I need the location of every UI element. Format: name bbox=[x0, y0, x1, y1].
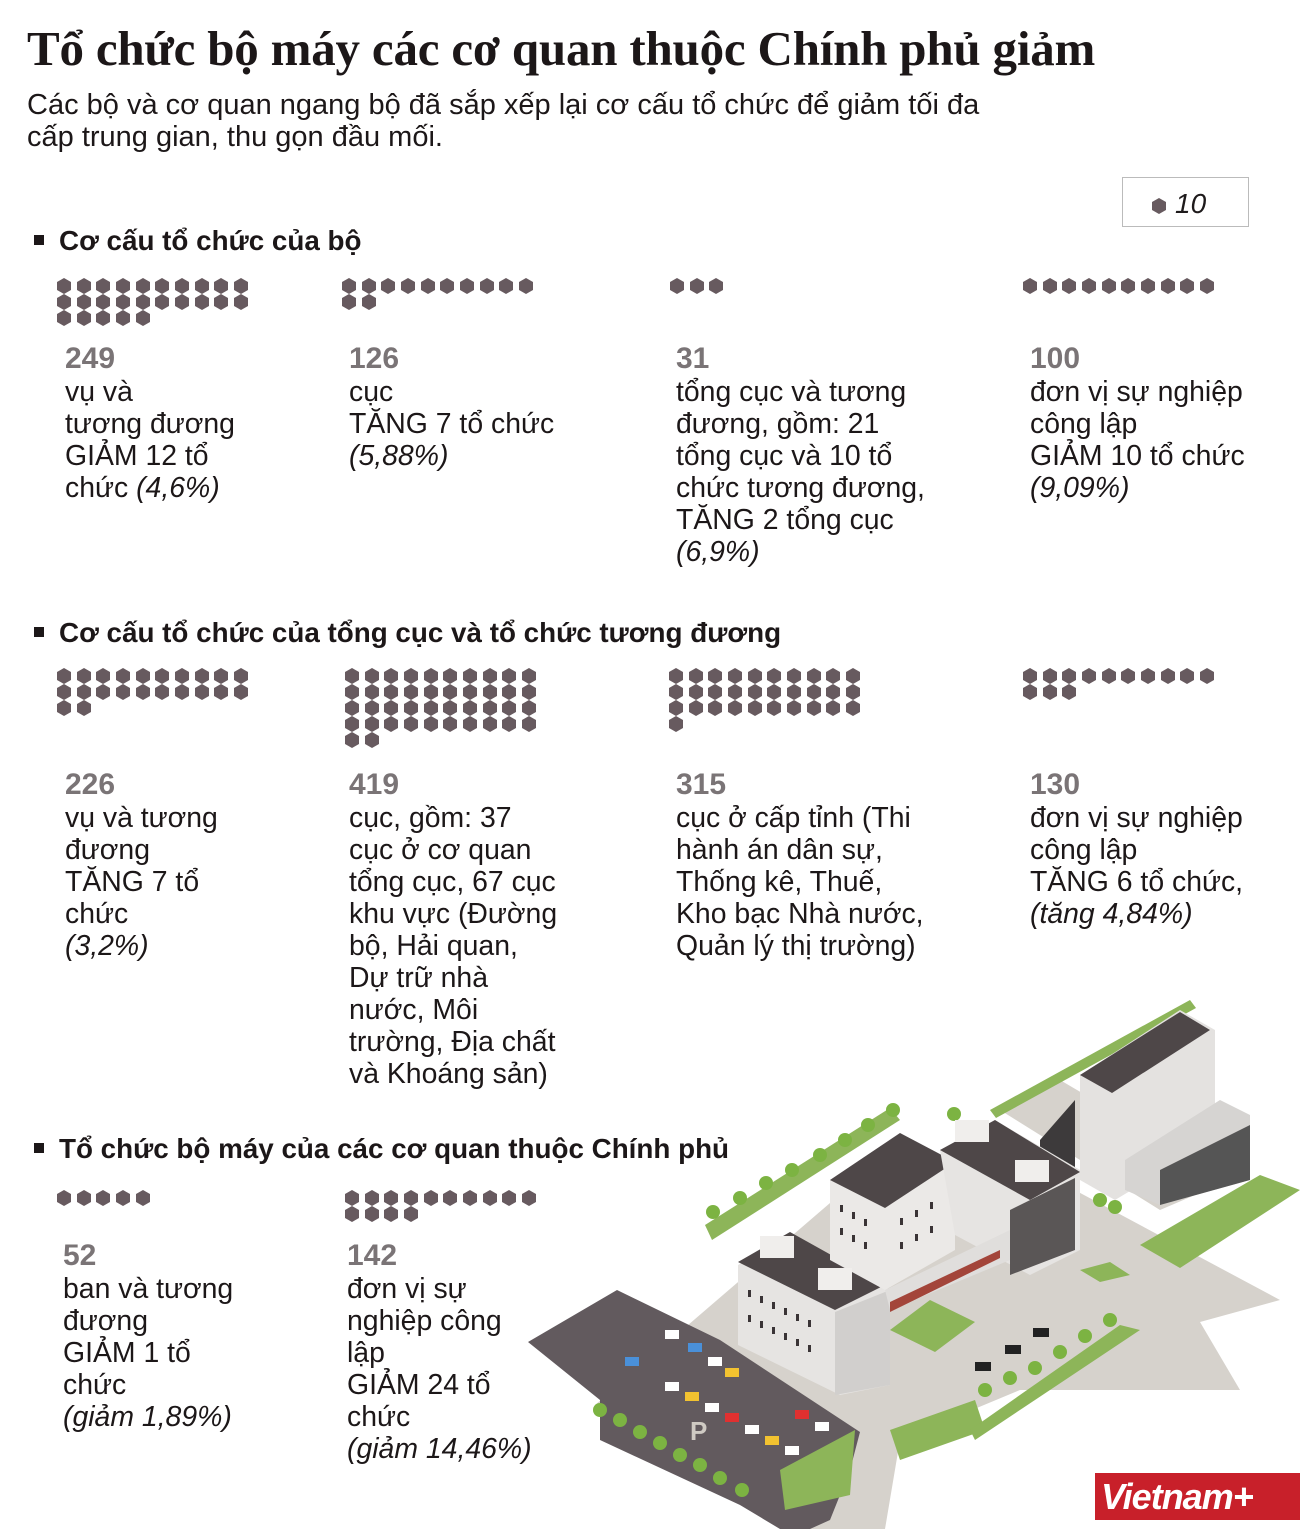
stat: 142: lập bbox=[347, 1337, 385, 1369]
stat: 142: (giảm 14,46%) bbox=[347, 1433, 532, 1465]
subtitle bbox=[27, 89, 980, 153]
stat: 315: Kho bạc Nhà nước, bbox=[676, 898, 924, 930]
stat: 226: vụ và tương bbox=[65, 802, 218, 834]
stat: 130: đơn vị sự nghiệp bbox=[1030, 802, 1243, 834]
dots: 100 bbox=[1023, 278, 1214, 294]
stat: 130 bbox=[1030, 768, 1243, 930]
illustration: government buildings: P bbox=[690, 1416, 707, 1446]
stat: 52: GIẢM 1 tổ bbox=[63, 1337, 191, 1369]
stat: 419 bbox=[349, 768, 557, 1090]
stat: 142: GIẢM 24 tổ bbox=[347, 1369, 491, 1401]
building right bbox=[1080, 1010, 1215, 1200]
legend: 10 bbox=[1175, 188, 1206, 219]
stat: 100: (9,09%) bbox=[1030, 472, 1129, 504]
stat: 249: GIẢM 12 tổ bbox=[65, 440, 209, 472]
stat: 419: khu vực (Đường bbox=[349, 898, 557, 930]
main building bbox=[738, 1235, 890, 1395]
subtitle: Các bộ và cơ quan ngang bộ đã sắp xếp lại cơ cấu tổ chức để giảm tối đa bbox=[27, 89, 979, 121]
stat: 226: 226 bbox=[65, 768, 115, 801]
dots: 130 bbox=[1023, 668, 1214, 700]
dots: 52 bbox=[57, 1190, 150, 1206]
stat: 142: chức bbox=[347, 1401, 410, 1433]
stat: 31: tổng cục và tương bbox=[676, 376, 906, 408]
dots: 31 bbox=[670, 278, 723, 294]
stat: 226: đương bbox=[65, 834, 150, 866]
stat: 419: nước, Môi bbox=[349, 994, 478, 1026]
stat: 315: hành án dân sự, bbox=[676, 834, 883, 866]
green patches bbox=[705, 1108, 900, 1240]
stat: 100 bbox=[1030, 342, 1245, 504]
dots: 315 bbox=[669, 668, 860, 732]
heading: section 2: Cơ cấu tổ chức của tổng cục và tổ chức tương đương bbox=[59, 617, 781, 648]
stat: 31: (6,9%) bbox=[676, 536, 760, 568]
stat: 249: chức (4,6%) bbox=[65, 472, 220, 504]
windows bbox=[748, 1202, 933, 1352]
stat: 419: Dự trữ nhà bbox=[349, 962, 488, 994]
stat: 126 bbox=[349, 342, 554, 472]
stat: 126: TĂNG 7 tổ chức bbox=[349, 408, 554, 440]
stat: 31: chức tương đương, bbox=[676, 472, 925, 504]
stat: 315 bbox=[676, 768, 924, 962]
parking bbox=[528, 1290, 860, 1529]
stat: 226: chức bbox=[65, 898, 128, 930]
stat: 126: cục bbox=[349, 376, 393, 408]
stat: 126: 126 bbox=[349, 342, 399, 375]
logo: Vietnam+ bbox=[1095, 1473, 1300, 1520]
subtitle: cấp trung gian, thu gọn đầu mối. bbox=[27, 121, 443, 153]
dots: 419 bbox=[345, 668, 536, 748]
legend bbox=[1122, 177, 1249, 227]
stat: 52: đương bbox=[63, 1305, 148, 1337]
stat: 249: tương đương bbox=[65, 408, 235, 440]
stat: 142: nghiệp công bbox=[347, 1305, 502, 1337]
dots: 142 bbox=[345, 1190, 536, 1222]
stat: 249 bbox=[65, 342, 235, 504]
stat: 249: vụ và bbox=[65, 376, 133, 408]
stat: 31: TĂNG 2 tổng cục bbox=[676, 504, 894, 536]
logo: Vietnam+: Vietnam+ bbox=[1101, 1476, 1253, 1517]
stat: 100: đơn vị sự nghiệp bbox=[1030, 376, 1243, 408]
stat: 31: tổng cục và 10 tổ bbox=[676, 440, 892, 472]
stat: 52 bbox=[63, 1239, 233, 1433]
stat: 130: 130 bbox=[1030, 768, 1080, 801]
heading: section 3: Tổ chức bộ máy của các cơ quan thuộc Chính phủ bbox=[59, 1133, 729, 1164]
stat: 31: đương, gồm: 21 bbox=[676, 408, 879, 440]
stat: 419: tổng cục, 67 cục bbox=[349, 866, 556, 898]
stat: 130: (tăng 4,84%) bbox=[1030, 898, 1193, 930]
dots: 226 bbox=[57, 668, 248, 716]
stat: 31 bbox=[676, 342, 925, 568]
stat: 315: 315 bbox=[676, 768, 726, 801]
heading: section 1: Cơ cấu tổ chức của bộ bbox=[59, 225, 361, 256]
stat: 419: trường, Địa chất bbox=[349, 1026, 555, 1058]
stat: 226 bbox=[65, 768, 218, 962]
stat: 142: 142 bbox=[347, 1239, 397, 1272]
trees bbox=[593, 1103, 1122, 1497]
stat: 126: (5,88%) bbox=[349, 440, 448, 472]
title: Tổ chức bộ máy các cơ quan thuộc Chính phủ giảm bbox=[27, 21, 1095, 76]
stat: 31: 31 bbox=[676, 342, 709, 375]
stat: 315: cục ở cấp tỉnh (Thi bbox=[676, 802, 911, 834]
stat: 52: ban và tương bbox=[63, 1273, 233, 1305]
stat: 100: 100 bbox=[1030, 342, 1080, 375]
stat: 419: cục, gồm: 37 bbox=[349, 802, 512, 834]
stat: 315: Quản lý thị trường) bbox=[676, 930, 916, 962]
stat: 142 bbox=[347, 1239, 532, 1465]
stat: 249: 249 bbox=[65, 342, 115, 375]
stat: 419: bộ, Hải quan, bbox=[349, 930, 518, 962]
stat: 130: TĂNG 6 tổ chức, bbox=[1030, 866, 1243, 898]
stat: 226: (3,2%) bbox=[65, 930, 149, 962]
stat: 226: TĂNG 7 tổ bbox=[65, 866, 199, 898]
stat: 52: 52 bbox=[63, 1239, 96, 1272]
stat: 419: 419 bbox=[349, 768, 399, 801]
stat: 52: (giảm 1,89%) bbox=[63, 1401, 232, 1433]
stat: 419: cục ở cơ quan bbox=[349, 834, 531, 866]
ground bbox=[595, 1150, 1280, 1529]
dots: 249 bbox=[57, 278, 248, 326]
stat: 100: GIẢM 10 tổ chức bbox=[1030, 440, 1245, 472]
stat: 142: đơn vị sự bbox=[347, 1273, 467, 1305]
dots: 126 bbox=[342, 278, 533, 310]
stat: 52: chức bbox=[63, 1369, 126, 1401]
cars bbox=[625, 1328, 1049, 1455]
stat: 419: và Khoáng sản) bbox=[349, 1058, 548, 1090]
stat: 315: Thống kê, Thuế, bbox=[676, 866, 882, 898]
stat: 100: công lập bbox=[1030, 408, 1137, 440]
stat: 130: công lập bbox=[1030, 834, 1137, 866]
